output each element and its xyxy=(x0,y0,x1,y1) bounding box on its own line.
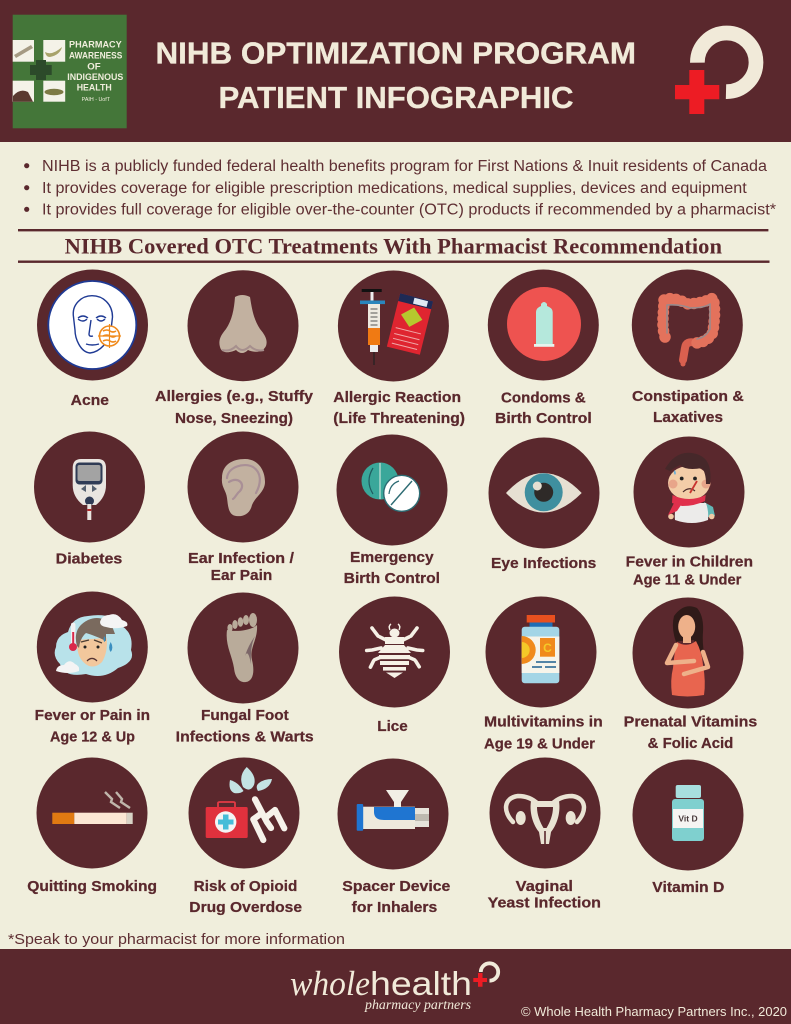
item: allergies: Allergies (e.g., Stuffy xyxy=(155,389,313,405)
item: vaginal yeast infection: Vaginal xyxy=(516,879,573,895)
item: spacer device: Spacer Device xyxy=(342,879,450,895)
item: emergency birth control: Birth Control xyxy=(344,571,440,587)
icon: eye xyxy=(506,473,582,512)
logo: whole health pharmacy partners: pharmacy partners xyxy=(364,997,471,1012)
item: prenatal vitamins: & Folic Acid xyxy=(648,736,733,752)
intro bullet list: It provides full coverage for eligible over-the-counter (OTC) products if recommended by a pharmacist* xyxy=(42,202,776,218)
item: fever in children xyxy=(626,436,753,589)
item: spacer device xyxy=(338,758,450,916)
item: fever or pain: Fever or Pain in xyxy=(35,708,150,724)
item: fungal foot: Infections & Warts xyxy=(176,730,314,746)
header band xyxy=(0,0,791,142)
item: fever in children: Age 11 & Under xyxy=(633,573,742,589)
icon: louse xyxy=(367,624,423,678)
icon: foot sole xyxy=(227,613,257,682)
footer band xyxy=(0,949,791,1024)
icon: sick child xyxy=(665,453,715,523)
icon: uterus xyxy=(506,796,584,844)
item: lice: Lice xyxy=(377,719,408,735)
logo: whole health pharmacy partners xyxy=(290,963,498,1012)
icon: ear xyxy=(222,459,265,516)
item: allergic reaction xyxy=(333,270,465,427)
section heading: NIHB Covered OTC Treatments With Pharmacist Recommendation xyxy=(65,233,722,258)
item: condoms: Birth Control xyxy=(495,411,592,427)
copyright: © Whole Health Pharmacy Partners Inc., 2020 xyxy=(521,1004,787,1019)
item: fever or pain xyxy=(35,592,150,746)
item: allergic reaction: Allergic Reaction xyxy=(333,390,461,406)
icon: vitamin bottle xyxy=(522,615,559,683)
title xyxy=(156,35,636,115)
title: NIHB OPTIMIZATION PROGRAM xyxy=(156,35,636,70)
item: condoms xyxy=(488,270,599,427)
item: allergic reaction: (Life Threatening) xyxy=(333,411,465,427)
intro bullet list xyxy=(24,158,776,218)
item: fungal foot xyxy=(176,592,314,746)
icon: cigarette xyxy=(52,792,133,824)
item: allergies xyxy=(155,270,313,427)
title: PATIENT INFOGRAPHIC xyxy=(218,80,574,115)
icon: face with acne xyxy=(48,281,136,369)
item: ear infection: Ear Pain xyxy=(211,568,272,584)
item: multivitamins: Age 19 & Under xyxy=(484,736,595,752)
item: acne: Acne xyxy=(71,393,109,409)
item: lice xyxy=(339,596,450,735)
item: constipation xyxy=(632,270,744,426)
item: fever in children: Fever in Children xyxy=(626,555,753,571)
item: vitamin d xyxy=(632,760,744,896)
item: condoms: Condoms & xyxy=(501,391,586,407)
logo: pharmacy awareness of indigenous health: OF xyxy=(87,61,101,72)
logo: pharmacy awareness of indigenous health: HEALTH xyxy=(77,83,112,94)
logo: pharmacy awareness of indigenous health: PAIH - UofT xyxy=(82,97,110,103)
icon: large intestine xyxy=(663,298,715,364)
item: emergency birth control: Emergency xyxy=(350,550,434,566)
logo: pharmacy awareness of indigenous health: PHARMACY xyxy=(69,39,122,50)
intro bullet list: NIHB is a publicly funded federal health benefits program for First Nations & Inuit residents of Canada xyxy=(42,158,767,175)
intro bullet list: It provides coverage for eligible prescription medications, medical supplies, devices and equipment xyxy=(42,180,747,197)
item: ear infection: Ear Infection / xyxy=(188,551,294,567)
logo: whole health pharmacy partners: health xyxy=(370,965,472,1002)
item: acne xyxy=(37,270,148,409)
item: spacer device: for Inhalers xyxy=(352,900,437,916)
item: multivitamins xyxy=(484,596,603,752)
item: allergies: Nose, Sneezing) xyxy=(175,411,293,427)
icon: nose xyxy=(219,295,267,353)
logo: whole health pharmacy partners: whole xyxy=(290,964,370,1003)
item: vaginal yeast infection xyxy=(488,758,601,912)
item: fever or pain: Age 12 & Up xyxy=(50,730,135,746)
item: eye infections: Eye Infections xyxy=(491,556,596,572)
logo: whole health ring and cross xyxy=(675,33,756,114)
icon: vitamin D bottle: Vit D xyxy=(678,814,698,824)
item: constipation: Constipation & xyxy=(632,389,744,405)
item: diabetes xyxy=(34,432,145,568)
logo: pharmacy awareness of indigenous health xyxy=(13,15,127,128)
icon: first aid kit, hand and drops xyxy=(206,767,284,840)
icon: pregnant woman xyxy=(667,606,708,696)
footnote: *Speak to your pharmacist for more information xyxy=(8,932,345,948)
icon: glucose meter xyxy=(73,459,106,520)
item: vitamin d: Vitamin D xyxy=(652,880,724,896)
item: prenatal vitamins: Prenatal Vitamins xyxy=(624,715,757,731)
item: prenatal vitamins xyxy=(624,598,757,752)
item: risk of opioid overdose: Risk of Opioid xyxy=(194,879,297,895)
icon: condom on red disc xyxy=(507,287,581,361)
item: multivitamins: Multivitamins in xyxy=(484,715,603,731)
item: vaginal yeast infection: Yeast Infection xyxy=(488,896,601,912)
item: emergency birth control xyxy=(336,434,448,587)
icon: feverish adult xyxy=(55,614,132,676)
item: ear infection xyxy=(188,432,298,584)
icon: vitamin bottle: C xyxy=(543,641,552,655)
icon: inhaler spacer xyxy=(357,790,429,831)
icon: two pills xyxy=(362,462,420,511)
item: fungal foot: Fungal Foot xyxy=(201,708,289,724)
item: diabetes: Diabetes xyxy=(56,552,122,568)
item: eye infections xyxy=(488,438,600,572)
icon: auto-injector syringe and box xyxy=(360,289,433,365)
item: quitting smoking xyxy=(27,758,157,895)
item: risk of opioid overdose xyxy=(188,758,302,916)
logo: pharmacy awareness of indigenous health: INDIGENOUS xyxy=(67,72,123,83)
item: risk of opioid overdose: Drug Overdose xyxy=(189,900,302,916)
item: quitting smoking: Quitting Smoking xyxy=(27,879,157,895)
item: constipation: Laxatives xyxy=(653,410,723,426)
logo: pharmacy awareness of indigenous health: AWARENESS xyxy=(69,50,122,61)
